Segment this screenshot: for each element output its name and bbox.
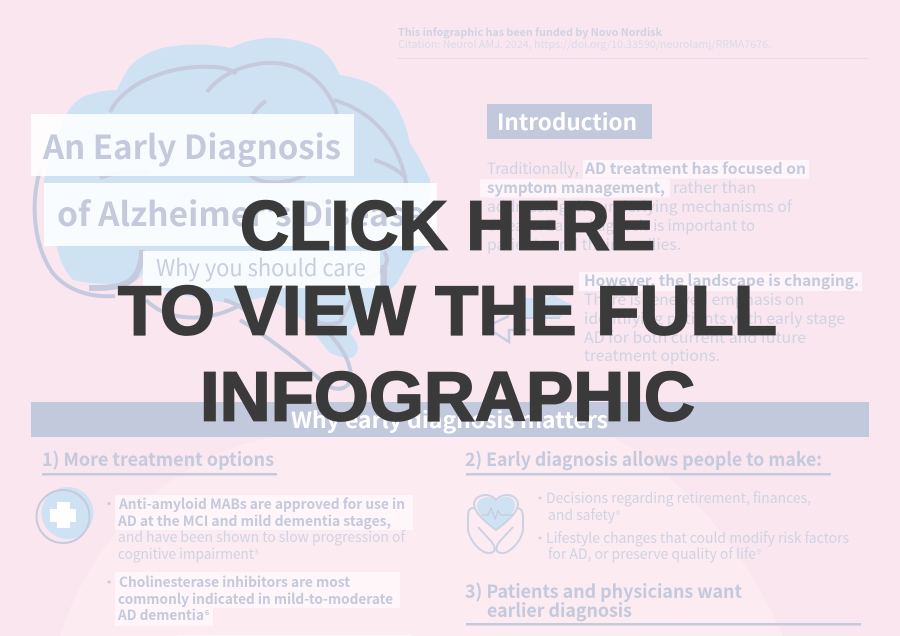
text block: introduction paragraph: disease. Early diagnosis is important to [487, 214, 755, 236]
text block: anti-amyloid bullet: and have been shown to slow progression of [118, 527, 406, 547]
text block: introduction paragraph: addressing the underlying mechanisms of [487, 195, 793, 217]
heading band: why early diagnosis matters: Why early diagnosis matters [291, 403, 608, 435]
icon: heart in hands [468, 495, 523, 553]
heading: more treatment options: 1) More treatment options [42, 446, 274, 472]
text block: cholinesterase bullet: 6 [205, 608, 209, 618]
text block: anti-amyloid bullet: Anti-amyloid MABs are approved for use in [118, 494, 405, 514]
heading band: why early diagnosis matters [31, 402, 869, 437]
title: An Early Diagnosis [42, 121, 341, 169]
heading: patients and physicians [465, 578, 861, 626]
text block: decisions bullets [538, 488, 849, 564]
call to action overlay: TO VIEW THE FULL [118, 272, 777, 350]
text block: introduction paragraph: patients and their families. [487, 233, 681, 255]
text block: decisions bullets: and safety [548, 505, 616, 525]
text block: decisions bullets: 8 [616, 508, 620, 518]
text block: decisions bullets: 9 [757, 547, 761, 557]
text block: introduction paragraph: Traditionally, [487, 157, 579, 179]
icon: medical plus [36, 487, 94, 543]
subtitle: Why you should care [156, 249, 366, 283]
heading: early diagnosis allows: 2) Early diagnosis allows people to make: [465, 446, 822, 472]
text block: cholinesterase bullet [108, 572, 400, 626]
text block: landscape paragraph: identifying patients with early stage [584, 307, 845, 329]
funding and citation note: This infographic has been funded by Novo Nordisk [398, 25, 663, 40]
text block: cholinesterase bullet: commonly indicated in mild-to-moderate [118, 589, 393, 609]
text block: landscape paragraph: There is renewed emphasis on [584, 288, 804, 310]
text block: introduction paragraph: rather than [673, 176, 756, 198]
text block: landscape paragraph [579, 269, 862, 366]
icon: brain [35, 38, 432, 389]
heading: introduction: Introduction [497, 105, 637, 137]
call to action overlay: CLICK HERE [240, 186, 655, 264]
title [31, 114, 437, 246]
call to action overlay: INFOGRAPHIC [200, 358, 695, 436]
text block: decisions bullets: Decisions regarding retirement, finances, [546, 488, 811, 508]
text block: landscape paragraph: treatment options. [584, 344, 720, 366]
text block: anti-amyloid bullet [108, 494, 413, 564]
next highlight strip [177, 635, 411, 636]
text block: anti-amyloid bullet: cognitive impairment [118, 544, 255, 564]
heading: patients and physicians: earlier diagnosis [487, 597, 632, 623]
text block: introduction paragraph: AD treatment has focused on [584, 157, 806, 179]
text block: cholinesterase bullet: AD dementia [117, 605, 204, 625]
heading: patients and physicians: 3) Patients and physicians want [465, 578, 742, 604]
funding and citation note [397, 25, 868, 59]
text block: anti-amyloid bullet: AD at the MCI and mild dementia stages, [117, 511, 391, 531]
text block: introduction paragraph: symptom management, [487, 176, 665, 198]
text block: landscape paragraph: AD for both current and future [584, 326, 806, 348]
funding and citation note: Citation: Neurol AMJ. 2024, https://doi.org/10.33590/neurolamj/RRMA7676. [398, 37, 771, 52]
text block: decisions bullets: for AD, or preserve quality of life [548, 544, 756, 564]
text block: introduction paragraph [480, 157, 809, 255]
text block: cholinesterase bullet: Cholinesterase inhibitors are most [119, 572, 350, 592]
text block: landscape paragraph: However, the landscape is changing. [584, 269, 859, 291]
text block: anti-amyloid bullet: 5 [255, 547, 259, 557]
call to action overlay [118, 186, 777, 436]
title: of Alzheimer's Disease [57, 188, 425, 236]
text block: decisions bullets: Lifestyle changes that could modify risk factors [546, 528, 849, 548]
icon: arrow with cloud [486, 295, 572, 342]
